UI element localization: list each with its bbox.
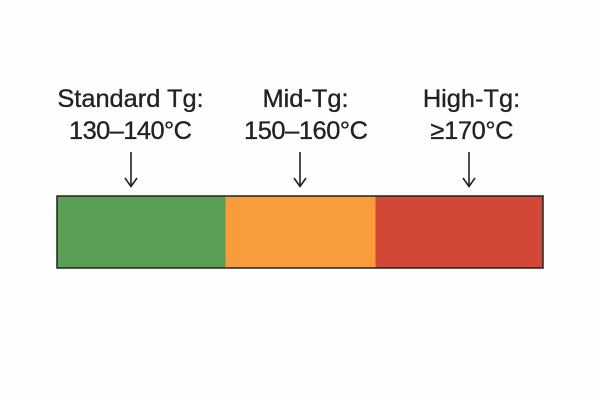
arrow: Mid-Tg bbox=[294, 152, 306, 186]
segment: orange bbox=[226, 196, 376, 268]
temperature bar bbox=[57, 196, 543, 268]
label: Mid-Tg: 150–160°C bbox=[244, 117, 368, 145]
label: High-Tg: High-Tg: bbox=[423, 85, 520, 113]
arrow: Standard Tg bbox=[125, 152, 137, 186]
label: Mid-Tg bbox=[244, 85, 368, 145]
label: Standard Tg bbox=[57, 85, 204, 145]
label: Mid-Tg: Mid-Tg: bbox=[262, 85, 349, 113]
label: Standard Tg: Standard Tg: bbox=[57, 85, 204, 113]
segment: red bbox=[376, 196, 543, 268]
arrow: High-Tg bbox=[463, 152, 475, 186]
label: High-Tg: ≥170°C bbox=[430, 117, 514, 145]
bar outline bbox=[57, 196, 543, 268]
label: High-Tg bbox=[423, 85, 520, 145]
label: Standard Tg: 130–140°C bbox=[69, 117, 192, 145]
segment: green bbox=[57, 196, 226, 268]
